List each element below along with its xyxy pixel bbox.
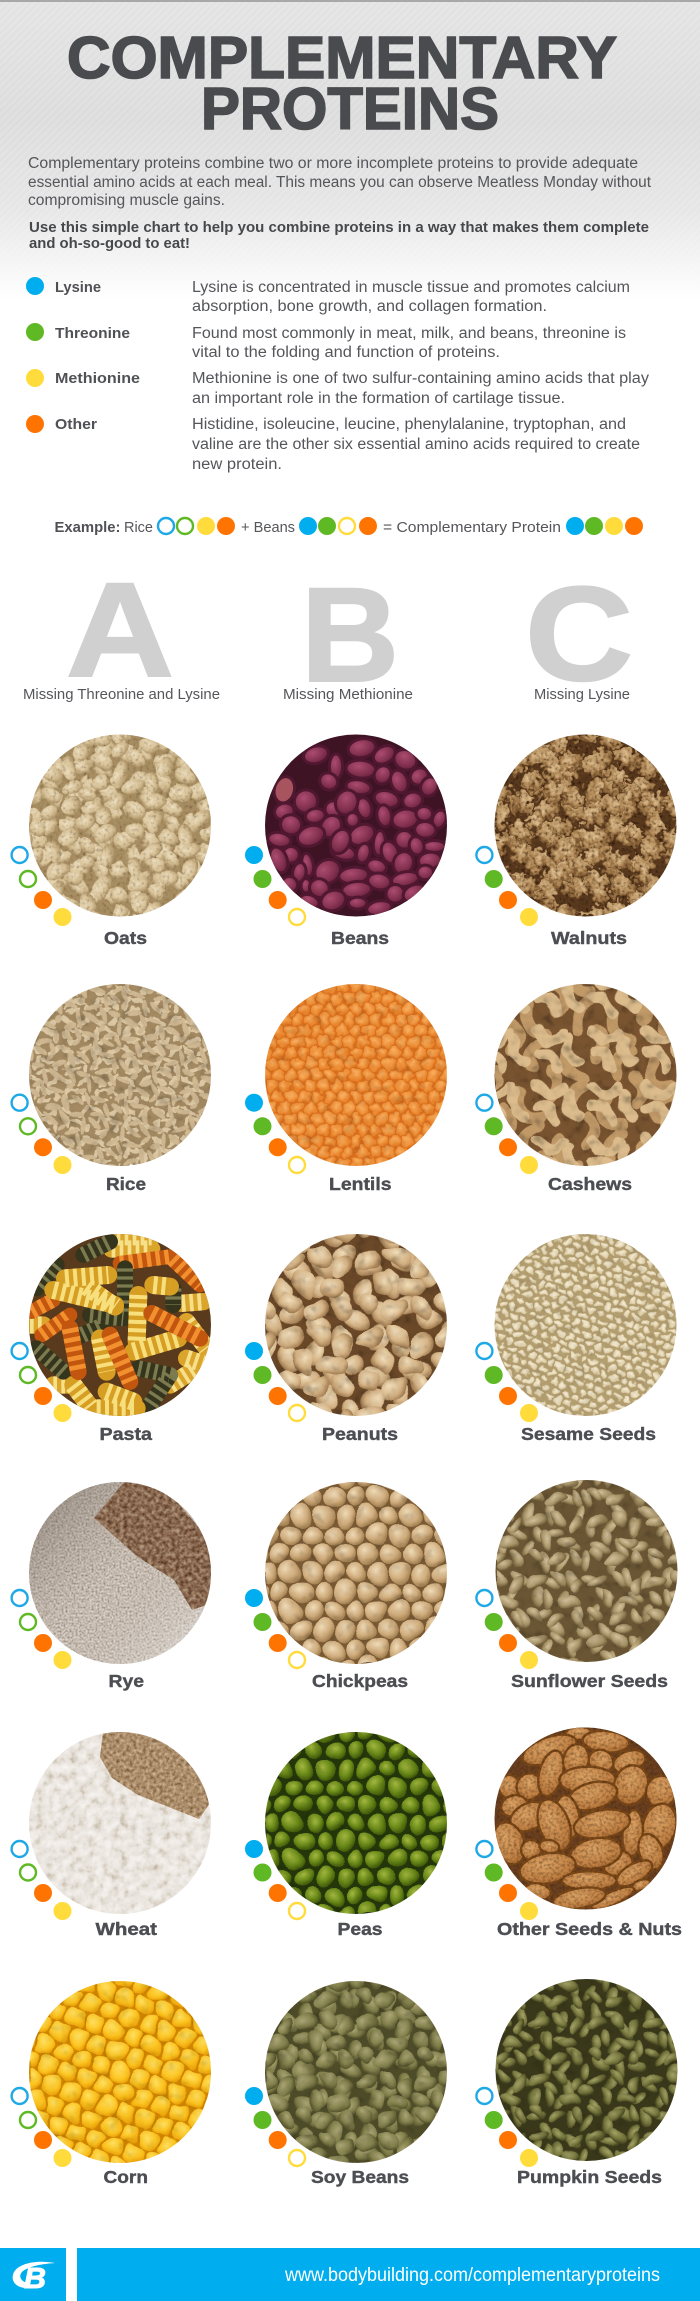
photo: cashews bbox=[494, 983, 678, 1167]
title: PROTEINS bbox=[201, 76, 499, 142]
icon: logo bbox=[13, 2262, 55, 2295]
name: lentils: Lentils bbox=[329, 1174, 392, 1194]
name: soy beans: Soy Beans bbox=[311, 2167, 409, 2187]
food: other seeds and nuts bbox=[476, 1726, 682, 1939]
title: COMPLEMENTARY bbox=[67, 25, 617, 91]
amino dots: cashews bbox=[476, 1095, 538, 1174]
photo: beans bbox=[264, 734, 449, 918]
food: oats bbox=[12, 734, 212, 948]
photo: chickpeas bbox=[264, 1481, 448, 1665]
legend: lysine: Lysine is concentrated in muscle tissue and promotes calcium bbox=[192, 279, 630, 296]
legend: threonine: Found most commonly in meat, milk, and beans, threonine is bbox=[192, 325, 626, 342]
amino dots: pasta bbox=[12, 1343, 72, 1422]
food: rice bbox=[12, 983, 212, 1194]
legend: threonine: Threonine bbox=[55, 325, 130, 342]
amino dots: peas bbox=[245, 1840, 305, 1919]
photo: rice bbox=[28, 983, 212, 1167]
food: rye bbox=[12, 1481, 212, 1691]
photo: pasta bbox=[28, 1233, 212, 1417]
photo: pumpkin seeds bbox=[494, 1978, 678, 2162]
amino dots: rye bbox=[12, 1590, 72, 1669]
name: rye: Rye bbox=[108, 1671, 144, 1691]
name: oats: Oats bbox=[104, 928, 147, 948]
amino dots: lentils bbox=[245, 1094, 305, 1173]
title bbox=[67, 25, 617, 142]
legend: other: Histidine, isoleucine, leucine, phenylalanine, tryptophan, and bbox=[192, 416, 626, 433]
legend: other: Other bbox=[55, 416, 97, 433]
photo: soy beans bbox=[264, 1980, 448, 2164]
intro paragraph: Complementary proteins combine two or more incomplete proteins to provide adequate bbox=[28, 155, 638, 172]
intro paragraph bbox=[28, 155, 652, 209]
food: corn bbox=[12, 1980, 212, 2187]
amino dots: sunflower seeds bbox=[476, 1590, 538, 1669]
legend: methionine: Methionine bbox=[55, 370, 140, 387]
legend: other bbox=[26, 415, 640, 473]
amino dots: peanuts bbox=[245, 1342, 305, 1421]
food: walnuts bbox=[476, 734, 678, 948]
column C header: Missing Lysine bbox=[534, 687, 630, 703]
url: www.bodybuilding.com/complementaryproteins bbox=[284, 2265, 660, 2286]
amino dots: sesame seeds bbox=[476, 1343, 538, 1422]
name: chickpeas: Chickpeas bbox=[312, 1671, 408, 1691]
name: pasta: Pasta bbox=[100, 1424, 152, 1444]
intro paragraph: compromising muscle gains. bbox=[28, 192, 225, 209]
amino dots: other seeds and nuts bbox=[476, 1841, 538, 1920]
photo: oats bbox=[28, 734, 212, 918]
bold instruction bbox=[29, 219, 649, 252]
food: beans bbox=[245, 734, 449, 948]
amino dots: walnuts bbox=[476, 847, 538, 926]
photo: walnuts bbox=[494, 734, 678, 918]
photo: sesame seeds bbox=[494, 1233, 678, 1417]
legend: methionine bbox=[26, 369, 649, 407]
name: rice: Rice bbox=[106, 1174, 146, 1194]
photo: almonds bbox=[488, 1726, 681, 1914]
name: peanuts: Peanuts bbox=[322, 1424, 398, 1444]
amino dots: oats bbox=[12, 847, 72, 926]
amino dots: corn bbox=[12, 2088, 72, 2167]
name: wheat: Wheat bbox=[96, 1919, 157, 1939]
legend: methionine: Methionine is one of two sulfur-containing amino acids that play bbox=[192, 370, 649, 387]
photo: corn bbox=[28, 1980, 212, 2164]
column B header: Missing Methionine bbox=[283, 687, 413, 703]
column B header: B bbox=[301, 561, 399, 710]
example equation bbox=[54, 517, 643, 536]
legend: threonine bbox=[26, 323, 626, 361]
icon: logo: B bbox=[24, 2263, 46, 2295]
intro paragraph: essential amino acids at each meal. This means you can observe Meatless Monday without bbox=[28, 174, 652, 191]
amino dots: wheat bbox=[12, 1841, 72, 1920]
photo: wheat bbox=[28, 1731, 212, 1915]
food: peas bbox=[245, 1731, 448, 1939]
legend: methionine: an important role in the formation of cartilage tissue. bbox=[192, 390, 565, 407]
name: walnuts: Walnuts bbox=[551, 928, 627, 948]
name: pumpkin seeds: Pumpkin Seeds bbox=[517, 2167, 662, 2187]
bold instruction: and oh-so-good to eat! bbox=[29, 235, 190, 252]
amino dots: pumpkin seeds bbox=[476, 2088, 538, 2167]
example equation: + Beans bbox=[241, 520, 295, 536]
legend: other: valine are the other six essential amino acids required to create bbox=[192, 436, 640, 453]
amino dots: beans bbox=[245, 846, 305, 925]
photo: lentils bbox=[264, 983, 448, 1167]
food: peanuts bbox=[245, 1233, 448, 1444]
food: cashews bbox=[476, 983, 678, 1194]
name: corn: Corn bbox=[104, 2167, 148, 2187]
amino dots: chickpeas bbox=[245, 1589, 305, 1668]
food: soy beans bbox=[245, 1980, 448, 2187]
photo: peanuts bbox=[264, 1233, 448, 1417]
column A header bbox=[23, 556, 220, 705]
name: peas: Peas bbox=[338, 1919, 383, 1939]
photo: sunflower seeds bbox=[494, 1479, 678, 1663]
name: sesame seeds: Sesame Seeds bbox=[521, 1424, 656, 1444]
example equation: Rice bbox=[124, 520, 153, 536]
food: sunflower seeds bbox=[476, 1479, 678, 1691]
name: cashews: Cashews bbox=[548, 1174, 632, 1194]
name: beans: Beans bbox=[331, 928, 389, 948]
example equation: = Complementary Protein bbox=[383, 520, 561, 536]
food: wheat bbox=[12, 1731, 212, 1939]
column A header: A bbox=[66, 556, 174, 705]
legend: threonine: vital to the folding and function of proteins. bbox=[192, 344, 500, 361]
food: lentils bbox=[245, 983, 448, 1194]
amino dots: soy beans bbox=[245, 2087, 305, 2166]
footer bbox=[0, 2248, 700, 2301]
food: chickpeas bbox=[245, 1481, 448, 1691]
amino dots: rice bbox=[12, 1095, 72, 1174]
legend: other: new protein. bbox=[192, 456, 282, 473]
photo: rye bbox=[28, 1481, 212, 1665]
name: sunflower seeds: Sunflower Seeds bbox=[511, 1671, 668, 1691]
legend: lysine: Lysine bbox=[55, 279, 101, 296]
example equation: Example: bbox=[54, 519, 120, 536]
food: pumpkin seeds bbox=[476, 1978, 678, 2187]
column A header: Missing Threonine and Lysine bbox=[23, 687, 220, 703]
bold instruction: Use this simple chart to help you combine proteins in a way that makes them complete bbox=[29, 219, 649, 236]
food: pasta bbox=[12, 1233, 212, 1444]
photo: peas bbox=[264, 1731, 448, 1915]
food: sesame seeds bbox=[476, 1233, 678, 1444]
legend bbox=[26, 277, 649, 473]
name: other seeds and nuts: Other Seeds & Nuts bbox=[497, 1919, 682, 1939]
legend: lysine bbox=[26, 277, 630, 315]
legend: lysine: absorption, bone growth, and collagen formation. bbox=[192, 298, 547, 315]
column C header: C bbox=[525, 560, 633, 709]
